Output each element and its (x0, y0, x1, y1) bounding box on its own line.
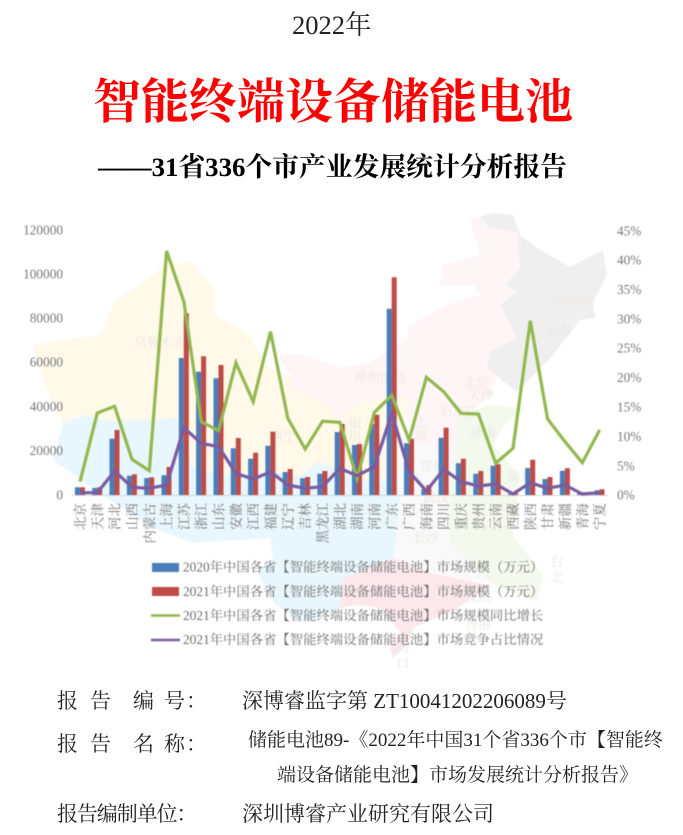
report number row (57, 689, 567, 713)
map city labels: 武汉 (423, 490, 449, 505)
report name row: 告 (90, 732, 111, 756)
bars: 2021 market size (80, 277, 604, 495)
report publisher row: 报告编制单位： (57, 802, 196, 826)
map city labels: 川 (348, 429, 362, 444)
province labels: 湖北 (333, 503, 348, 530)
province labels: 内蒙古 (141, 503, 157, 544)
left axis labels: 100000 (23, 266, 63, 282)
map city labels: 太 (414, 416, 428, 431)
left axis labels: 0 (56, 488, 63, 502)
map city labels: 银 (348, 416, 362, 431)
right axis labels: 40% (617, 252, 641, 268)
report number row: 深博睿监字第 ZT10041202206089号 (242, 689, 567, 713)
line: market growth (80, 251, 600, 482)
map city labels: 郑州 (420, 459, 446, 474)
province labels: 辽宁 (281, 503, 296, 530)
map city labels: 长春 (546, 323, 572, 338)
map city labels: 哈尔滨 (552, 293, 592, 308)
legend (151, 558, 543, 647)
province labels: 北京 (73, 503, 88, 530)
main title: 智能终端设备储能电池 (93, 76, 573, 129)
province labels: 陕西 (522, 503, 538, 530)
province labels: 新疆 (558, 503, 573, 530)
map city labels: 西宁 (270, 429, 296, 444)
right axis labels: 15% (617, 400, 641, 414)
report name row: ： (186, 732, 207, 756)
province labels: 青海 (574, 503, 590, 530)
report name row: 称 (164, 732, 185, 756)
province labels: 山东 (212, 503, 227, 530)
map city labels: 北 (550, 570, 564, 585)
map city labels: 石家庄 (439, 404, 479, 419)
province labels: 贵州 (470, 503, 486, 530)
province labels: 江西 (246, 503, 261, 530)
map city labels: 北京 (463, 375, 489, 390)
legend: 2021年中国各省【智能终端设备储能电池】市场竞争占比情况 (183, 631, 543, 647)
left axis labels: 120000 (23, 222, 63, 238)
right axis labels: 20% (617, 370, 641, 385)
map city labels: 长沙 (413, 530, 440, 545)
report number row: 编 (133, 689, 154, 713)
province labels: 河南 (366, 503, 382, 530)
report number row: 告 (90, 689, 111, 713)
legend: 2020年中国各省【智能终端设备储能电池】市场规模（万元） (183, 558, 543, 574)
legend: 2021年中国各省【智能终端设备储能电池】市场规模同比增长 (183, 607, 543, 623)
map city labels: 海 (396, 640, 410, 655)
report number row: ： (186, 689, 207, 713)
report publisher row (57, 802, 494, 826)
map city labels: 深圳 (465, 590, 491, 605)
left axis labels: 40000 (30, 399, 63, 414)
map city labels: 香港 (465, 617, 491, 632)
province labels (73, 503, 608, 544)
province labels: 四川 (437, 503, 452, 530)
province labels: 云南 (488, 503, 504, 530)
province labels: 福建 (262, 503, 278, 530)
province labels: 广西 (402, 503, 417, 530)
right axis labels (617, 224, 641, 502)
province labels: 吉林 (297, 503, 313, 530)
report name row: 名 (133, 732, 154, 756)
year heading: 2022年 (292, 10, 372, 40)
map city labels: 原 (414, 429, 428, 444)
map city labels: 台 (550, 554, 564, 569)
subtitle: ——31省336个市产业发展统计分析报告 (98, 152, 567, 182)
province labels: 江苏 (176, 503, 192, 530)
line: competition share (80, 413, 600, 494)
map city labels: 天津 (468, 388, 494, 403)
province labels: 河北 (108, 503, 123, 530)
x axis line (71, 494, 608, 496)
report name row: 储能电池89-《2022年中国31个省336个市【智能终 (248, 730, 663, 751)
province labels: 上海 (160, 503, 175, 530)
province labels: 重庆 (454, 503, 469, 530)
map city labels (134, 293, 592, 671)
province labels: 天津 (90, 503, 105, 530)
left axis labels (23, 222, 63, 502)
report number row: 报 (57, 689, 78, 713)
province labels: 西藏 (505, 503, 521, 530)
report publisher row: 深圳博睿产业研究有限公司 (242, 802, 494, 826)
province labels: 甘肃 (541, 503, 556, 530)
right axis labels: 35% (617, 282, 641, 297)
right axis labels: 30% (617, 312, 641, 326)
background map of China (33, 213, 607, 671)
province labels: 湖南 (349, 503, 365, 530)
map city labels: 乌鲁木齐 (134, 335, 186, 350)
map city labels: 呼和浩特 (354, 370, 406, 385)
map city labels: 南京 (507, 469, 533, 484)
report number row: 号 (164, 689, 185, 713)
province labels: 山西 (125, 503, 140, 530)
left axis labels: 20000 (30, 443, 63, 458)
map city labels: 口 (396, 656, 410, 671)
province labels: 宁夏 (593, 503, 608, 530)
right axis labels: 25% (617, 340, 641, 356)
province labels: 广东 (385, 503, 400, 530)
province labels: 海南 (418, 503, 434, 530)
report name row: 报 (57, 732, 78, 756)
map city labels: 济南 (470, 425, 496, 440)
left axis labels: 80000 (30, 310, 63, 326)
report name row (57, 730, 663, 786)
province labels: 安徽 (228, 503, 244, 530)
legend: 2021年中国各省【智能终端设备储能电池】市场规模（万元） (183, 583, 543, 599)
province labels: 黑龙江 (314, 503, 330, 544)
right axis labels: 0% (617, 488, 635, 502)
right axis labels: 5% (617, 458, 635, 474)
right axis labels: 45% (617, 224, 641, 238)
left axis labels: 60000 (30, 354, 63, 370)
right axis labels: 10% (617, 429, 641, 444)
province labels: 浙江 (193, 503, 209, 530)
bars: 2020 market size (75, 309, 599, 495)
report name row: 端设备储能电池】市场发展统计分析报告》 (277, 765, 638, 786)
